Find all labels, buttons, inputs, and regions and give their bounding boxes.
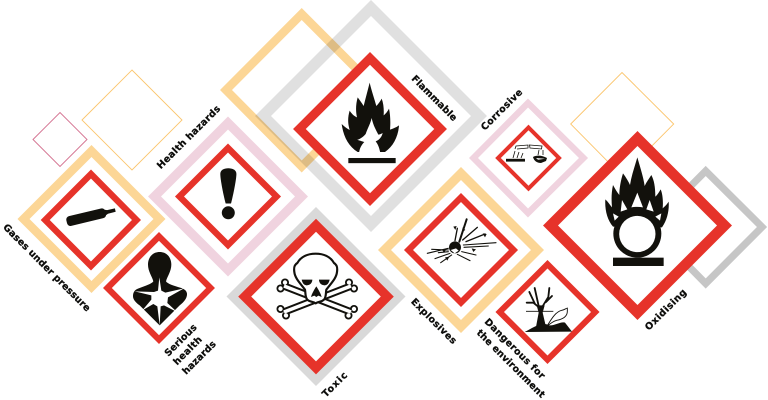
label: Health hazards: Health hazards [155,103,223,172]
outline diamond: orange right [571,72,674,176]
icon: health silhouette [133,252,187,325]
frame: pink diamond health hazards [154,123,302,270]
label: Corrosive: Corrosive [479,87,525,133]
frame: grey diamond right [650,171,762,284]
frame: large grey diamond [263,8,479,224]
outline diamond: small pink [33,112,87,166]
outline diamond: orange left [82,70,182,170]
icon: gas cylinder [66,205,116,227]
label: Serious health hazards [163,322,219,377]
frame: grey diamond toxic [233,214,399,380]
label: Explosives: Explosives [408,296,459,347]
hazard: serious health hazards [107,236,211,340]
hazard: health hazards [180,148,276,245]
icon: exploding bomb [427,219,496,263]
hazard: dangerous for the environment [500,264,595,360]
frame: pink diamond corrosive [474,103,584,213]
label: Gases under pressure: Gases under pressure [0,222,92,314]
hazard: gases under pressure [45,174,137,266]
hazard: corrosive [498,128,559,188]
frame: orange diamond explosives [384,174,538,326]
icon: exclamation mark [220,168,236,219]
hazard: toxic [245,225,387,368]
icon: dead tree and fish [525,288,572,332]
frame: large orange diamond [226,14,378,166]
hazard: explosives [408,198,514,302]
label: Flammable: Flammable [409,73,459,124]
hazard: flammable [299,58,441,200]
icon: flame over circle [605,157,669,266]
icon: skull and crossbones [276,254,358,320]
frame: orange diamond gases [24,151,160,287]
label: Toxic: Toxic [320,370,350,400]
label: Oxidising: Oxidising [643,287,689,333]
label: Serious health hazards: health [171,334,205,368]
label: Dangerous for the environment: Dangerous for [482,317,547,382]
icon: flame [342,83,399,163]
label: Serious health hazards: hazards [180,339,219,377]
icon: corrosion test tubes [506,145,547,163]
label: Dangerous for the environment: the environment [474,328,547,400]
hazard: oxidising [550,138,724,312]
label: Serious health hazards: Serious [163,322,200,359]
